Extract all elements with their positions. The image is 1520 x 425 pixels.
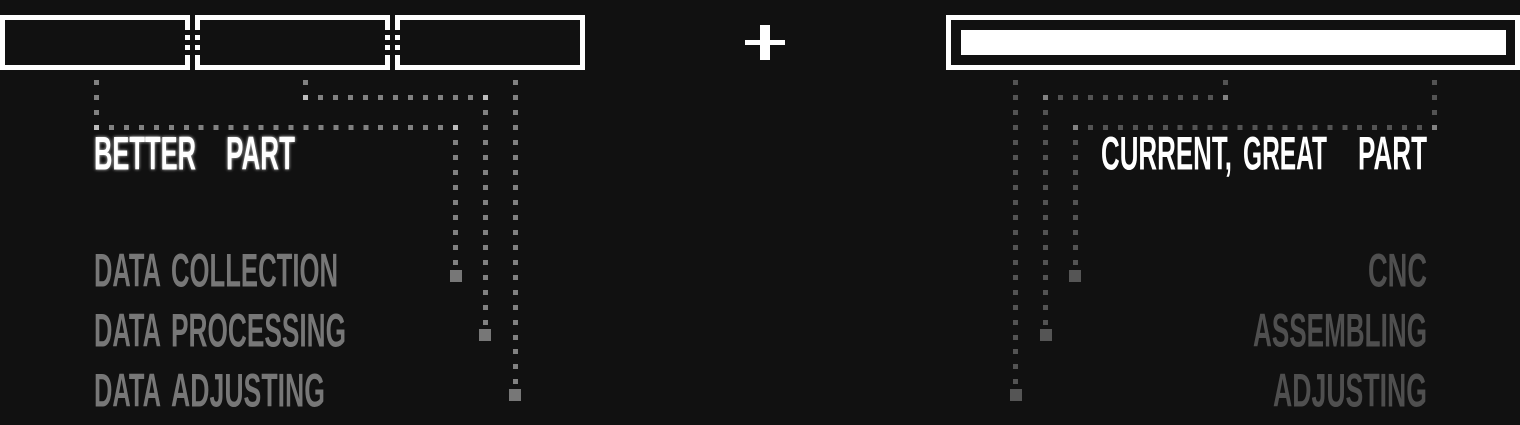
label: data collection [94, 244, 338, 297]
heading: current, great part: PART [1358, 126, 1427, 180]
segment 2 [195, 18, 390, 68]
label: data collection: DATA [94, 244, 161, 297]
label: data processing: DATA [94, 304, 161, 357]
left list [94, 244, 346, 417]
segment 3 [395, 18, 582, 68]
heading: better part: PART [226, 126, 295, 180]
solid bar: outlined box with filled bar [948, 18, 1518, 68]
label: data collection: COLLECTION [171, 244, 338, 297]
label: data processing [94, 304, 346, 357]
label: cnc: CNC [1368, 244, 1427, 297]
segment 1 [2, 18, 190, 68]
label: data adjusting: ADJUSTING [171, 364, 325, 417]
connector: better part to data processing [303, 80, 491, 341]
label: data processing: PROCESSING [171, 304, 346, 357]
heading: better part: BETTER [94, 126, 196, 180]
connector: current part to assembling [1040, 80, 1228, 341]
heading: current, great part: CURRENT, [1101, 126, 1232, 180]
connector: current part to cnc [1069, 80, 1437, 282]
plus sign [745, 25, 785, 60]
label: data adjusting: DATA [94, 364, 161, 417]
connector: better part to data collection [94, 80, 462, 282]
connector: current part to adjusting [1010, 80, 1022, 401]
heading: current, great part: GREAT [1243, 126, 1327, 180]
connector: better part to data adjusting [509, 80, 521, 401]
right list [1253, 244, 1427, 417]
segmented bar: three outlined sections [2, 18, 582, 68]
label: data adjusting [94, 364, 325, 417]
right dotted connectors [1010, 80, 1437, 401]
left dotted connectors [94, 80, 521, 401]
